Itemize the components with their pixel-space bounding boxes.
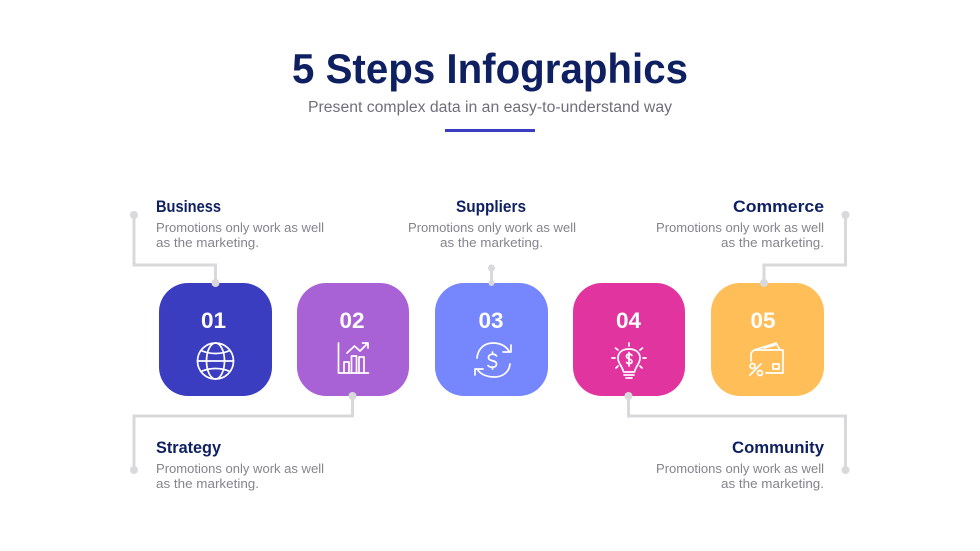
subtitle: Present complex data in an easy-to-understand way [308, 99, 672, 116]
step 4 card [573, 283, 685, 396]
step 1 card [159, 283, 272, 396]
icon: globe [198, 343, 234, 379]
connector: commerce [760, 211, 850, 287]
label: business: as the marketing. [156, 235, 259, 250]
label: strategy: Promotions only work as well [156, 461, 324, 476]
title underline [445, 129, 535, 132]
label: commerce: as the marketing. [721, 235, 824, 250]
connector: community [624, 392, 850, 474]
label: suppliers [408, 197, 576, 250]
label: community: as the marketing. [721, 476, 824, 491]
step 3 card [435, 283, 548, 396]
label: commerce: Promotions only work as well [656, 220, 824, 235]
label: suppliers: as the marketing. [440, 235, 543, 250]
label: commerce [656, 197, 824, 250]
step 5 number: 05 [750, 308, 776, 333]
step 2 card [297, 283, 409, 396]
step 5 card [711, 283, 824, 396]
title: 5 Steps Infographics [292, 45, 688, 92]
step 2 number: 02 [339, 308, 365, 333]
label: community [656, 438, 825, 491]
connector: strategy [130, 392, 356, 474]
label: business [156, 197, 324, 250]
icon: money cycle [475, 343, 511, 377]
step 3 number: 03 [478, 308, 504, 333]
step 1 number: 01 [201, 308, 226, 333]
connector: suppliers [488, 264, 495, 286]
step 4 number: 04 [616, 308, 641, 333]
label: strategy: as the marketing. [156, 476, 259, 491]
label: strategy: Strategy [156, 438, 222, 457]
icon: light bulb [612, 343, 646, 378]
label: community: Promotions only work as well [656, 461, 824, 476]
label: suppliers: Promotions only work as well [408, 220, 576, 235]
label: business: Promotions only work as well [156, 220, 324, 235]
connector: business [130, 211, 220, 287]
icon: wallet with percent [750, 343, 783, 376]
label: suppliers: Suppliers [456, 197, 526, 216]
label: business: Business [156, 197, 221, 216]
label: community: Community [732, 438, 825, 457]
label: commerce: Commerce [733, 197, 824, 216]
icon: bar chart [338, 343, 368, 373]
label: strategy [156, 438, 324, 491]
